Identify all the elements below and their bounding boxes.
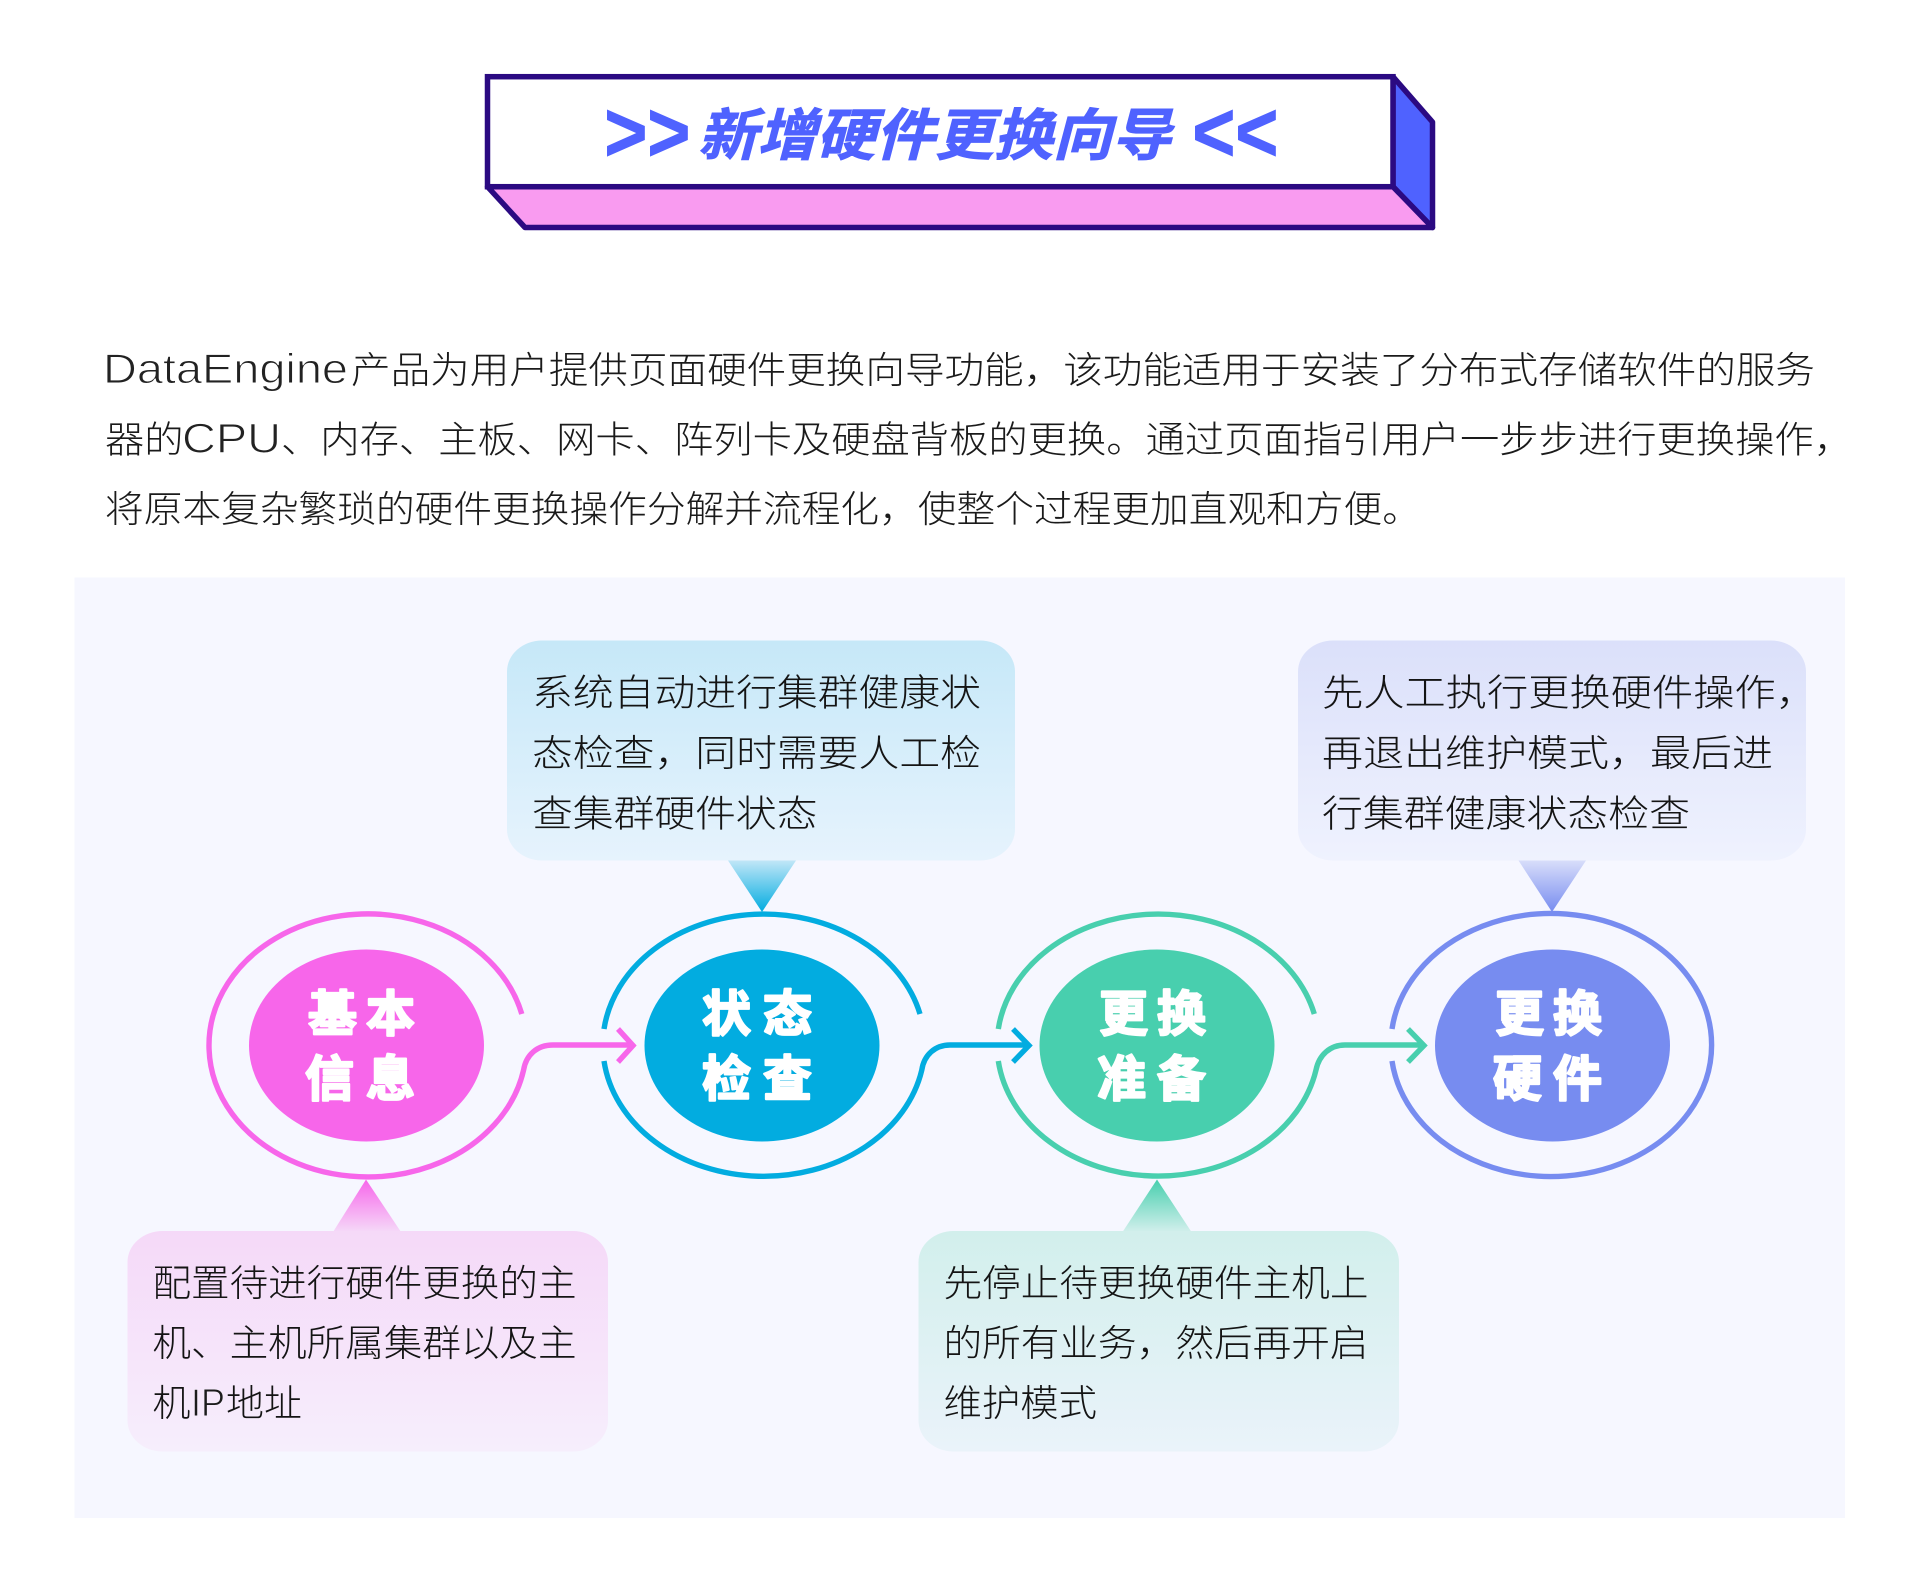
callout text — [152, 1263, 576, 1425]
title text: 新增硬件更换向导 — [698, 104, 1175, 167]
ring with arrow — [604, 914, 1028, 1176]
callout text — [944, 1263, 1368, 1424]
arrow head — [618, 1029, 633, 1062]
callout text: 地址 — [226, 1383, 302, 1424]
callout text — [1322, 672, 1817, 834]
intro paragraph: DataEngine — [103, 345, 348, 392]
callout text — [532, 672, 981, 834]
callout text: 配置待进行硬件更换的主 — [152, 1263, 576, 1304]
step 1: basic info — [209, 914, 633, 1177]
ring with arrow — [998, 914, 1423, 1176]
arrow head — [1408, 1029, 1424, 1062]
callout box — [128, 1231, 608, 1452]
step label: 更换 — [1495, 988, 1602, 1042]
step label: 状态 — [702, 988, 812, 1042]
step 4: replace hardware — [1392, 914, 1712, 1176]
callout box — [507, 640, 1015, 860]
callout pointer — [1122, 1180, 1192, 1232]
intro paragraph: 产品为用户提供页面硬件更换向导功能，该功能适用于安装了分布式存储软件的服务 — [351, 350, 1815, 391]
callout box — [918, 1231, 1399, 1452]
banner bottom face — [488, 187, 1432, 228]
callout text: 先人工执行更换硬件操作， — [1322, 672, 1817, 714]
callout text: 维护模式 — [944, 1383, 1097, 1424]
callout text: 态检查，同时需要人工检 — [532, 733, 981, 774]
callout: replacement preparation — [918, 1180, 1399, 1452]
panel: process flow background — [74, 578, 1845, 1518]
step label — [702, 988, 812, 1107]
step 3: replacement preparation — [998, 914, 1424, 1176]
callout: basic info — [128, 1180, 608, 1452]
title banner — [488, 77, 1432, 228]
step label: 信息 — [305, 1053, 415, 1107]
inner circle — [249, 950, 484, 1142]
callout pointer — [333, 1180, 401, 1232]
arrow head — [1013, 1029, 1029, 1062]
callout text: 查集群硬件状态 — [532, 794, 818, 834]
title text: << — [1191, 85, 1277, 179]
banner right face — [1393, 77, 1432, 228]
intro paragraph — [103, 345, 1853, 530]
callout: status check — [507, 640, 1015, 912]
callout text: 先停止待更换硬件主机上 — [944, 1263, 1368, 1304]
callout pointer — [1518, 859, 1587, 912]
ring — [1392, 914, 1712, 1176]
step label: 准备 — [1097, 1053, 1206, 1107]
step label — [1097, 988, 1206, 1107]
callout text: IP — [191, 1382, 225, 1425]
intro paragraph: CPU — [182, 414, 281, 462]
step label: 更换 — [1099, 988, 1206, 1042]
callout text: 机、主机所属集群以及主 — [152, 1323, 576, 1364]
callout text: 系统自动进行集群健康状 — [532, 672, 981, 714]
intro paragraph: 器的 — [105, 420, 184, 460]
callout text: 行集群健康状态检查 — [1322, 794, 1690, 834]
callout text: 再退出维护模式，最后进 — [1322, 733, 1773, 774]
inner circle — [1435, 950, 1670, 1142]
callout: replace hardware — [1298, 640, 1817, 912]
callout text: 机 — [152, 1383, 190, 1424]
intro paragraph: 将原本复杂繁琐的硬件更换操作分解并流程化，使整个过程更加直观和方便。 — [105, 489, 1421, 530]
title text — [603, 85, 1277, 179]
callout pointer — [727, 859, 797, 912]
callout box — [1298, 640, 1806, 860]
inner circle — [1040, 950, 1274, 1142]
step label: 硬件 — [1493, 1053, 1602, 1107]
step 2: status check — [604, 914, 1029, 1176]
intro paragraph: 、内存、主板、网卡、阵列卡及硬盘背板的更换。通过页面指引用户一步步进行更换操作， — [281, 420, 1853, 460]
step label — [305, 988, 415, 1107]
inner circle — [644, 950, 880, 1142]
banner front face — [488, 77, 1393, 187]
title text: >> — [603, 85, 689, 179]
callout text: 的所有业务，然后再开启 — [944, 1323, 1368, 1364]
step label: 基本 — [308, 988, 415, 1042]
step label — [1493, 988, 1602, 1107]
ring with arrow — [209, 914, 632, 1177]
step label: 检查 — [702, 1053, 812, 1107]
